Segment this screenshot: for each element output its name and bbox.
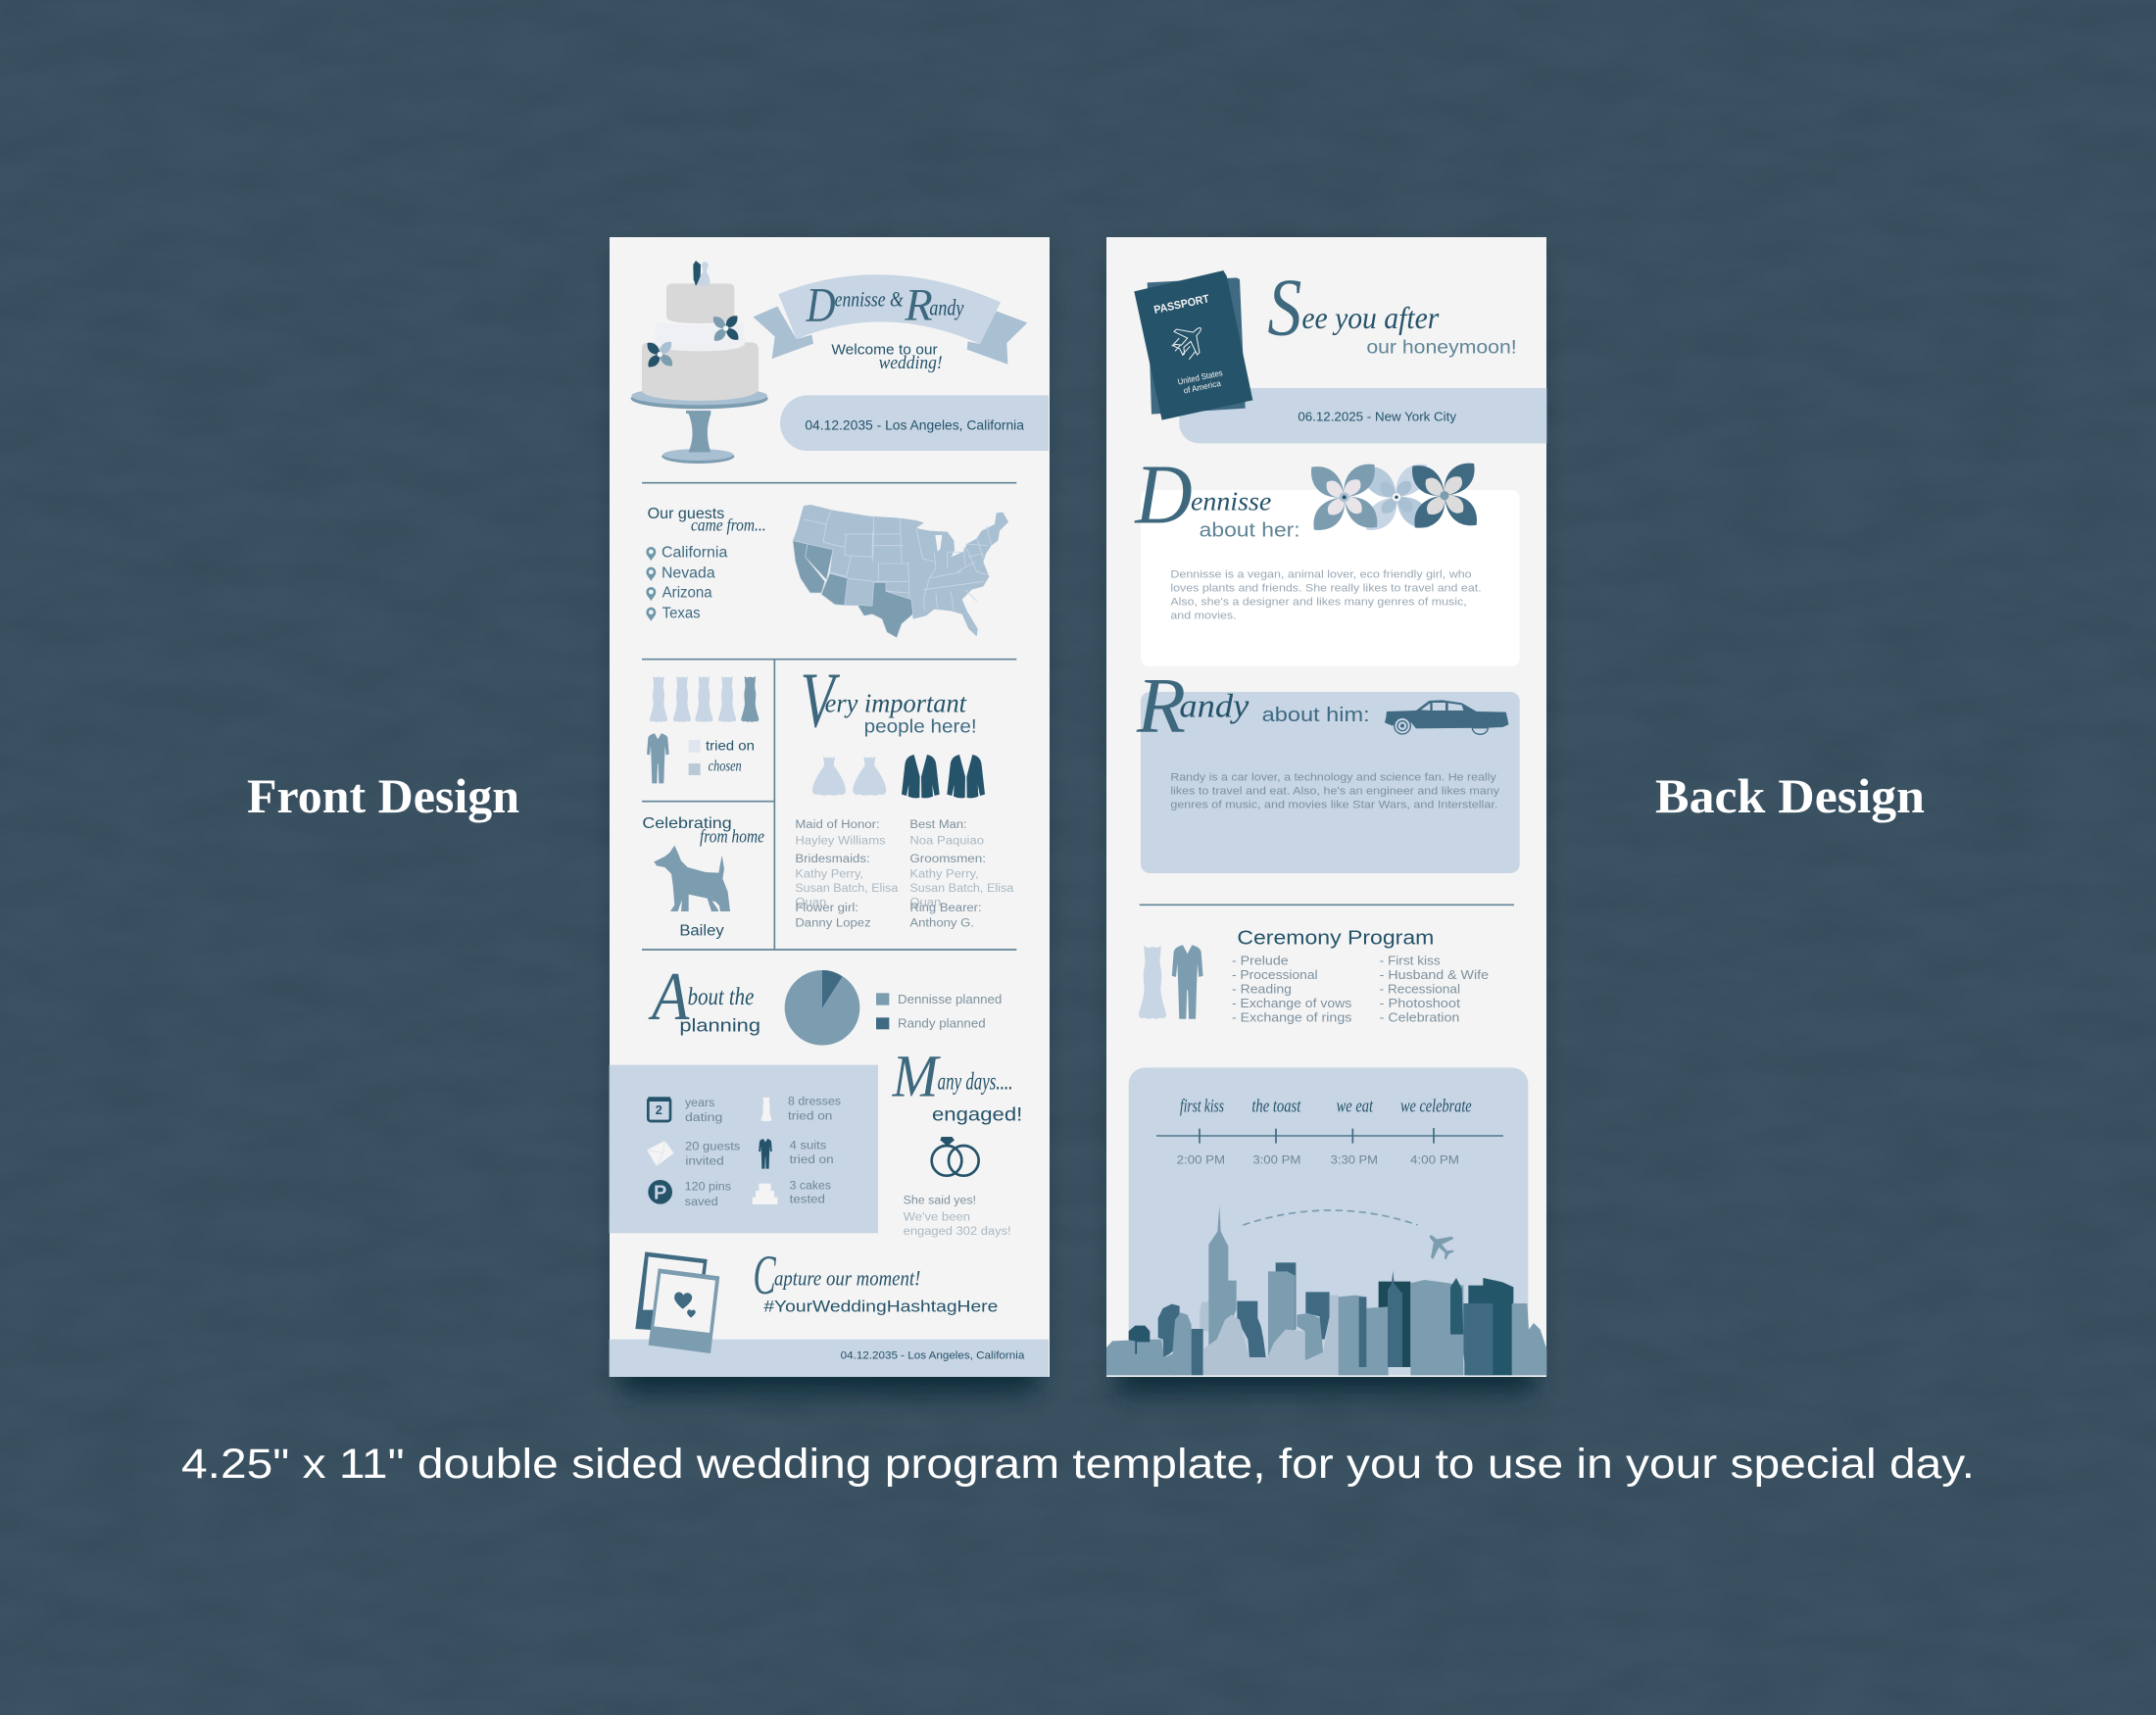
caption: 4.25" x 11" double sided wedding program template, for you to use in your special day. (181, 1441, 1975, 1488)
heading: capture our moment (753, 1246, 998, 1315)
back middle section (1136, 663, 1520, 1025)
bio: Randy: Randy is a car lover, a technology and science fan. He really (1170, 771, 1496, 783)
heading: ceremony program: Ceremony Program (1237, 927, 1434, 949)
banner: couple names: ennisse & (835, 287, 904, 312)
welcome text (831, 343, 943, 373)
icon: white cake (753, 1184, 777, 1204)
bio: Dennisse: and movies. (1170, 610, 1237, 621)
guests heading: Our guests (648, 506, 724, 522)
card: about him (1136, 663, 1520, 873)
map: united states (793, 505, 1008, 638)
icons: bridesmaid gowns and groomsmen jackets (812, 755, 985, 798)
wedding party list: groom side: Kathy Perry, (909, 866, 979, 880)
pie chart: planning share (785, 970, 859, 1046)
bio: Randy: genres of music, and movies like Star Wars, and Interstellar. (1170, 799, 1497, 810)
wedding party list: bride side: Bridesmaids: (795, 852, 870, 865)
wedding party list: groom side: Best Man: (909, 817, 967, 831)
icon: passport: of America (1183, 378, 1222, 396)
icon: pinterest: P (654, 1182, 666, 1203)
panel: front design (610, 237, 1050, 1377)
engaged note (904, 1194, 1011, 1238)
wedding party list: bride side: Maid of Honor: (795, 817, 880, 831)
guest state list: Texas (662, 606, 701, 622)
program list right: - Photoshoot (1380, 996, 1460, 1010)
guests heading: came from... (691, 515, 766, 535)
stat: guests invited (685, 1140, 740, 1167)
engaged note: We've been (904, 1210, 970, 1224)
bio: Randy: likes to travel and eat. Also, he's an engineer and likes many (1170, 785, 1500, 797)
timeline: 3:30 PM (1331, 1152, 1378, 1166)
heading: many days engaged: any days.... (938, 1068, 1012, 1096)
heading: capture our moment: apture our moment! (774, 1266, 920, 1291)
panel: back design (1106, 237, 1546, 1377)
heading: very important people: ery important (825, 689, 967, 718)
bio: Dennisse: Also, she's a designer and likes many genres of music, (1170, 596, 1467, 608)
panel shadows (621, 257, 1535, 1394)
icon: classic car (1385, 700, 1508, 734)
wedding party list: groom side: Susan Batch, Elisa (909, 881, 1014, 895)
heading: see you after: ee you after (1301, 301, 1440, 335)
icon: calendar (648, 1097, 670, 1121)
date band (1179, 388, 1546, 443)
date band: 06.12.2025 - New York City (1298, 410, 1457, 423)
panel: stats (610, 1065, 878, 1233)
timeline: we eat (1337, 1096, 1374, 1116)
engaged note: engaged 302 days! (904, 1224, 1011, 1238)
bio: Dennisse: Dennisse is a vegan, animal lover, eco friendly girl, who (1170, 568, 1472, 580)
bio: Dennisse (1170, 568, 1482, 621)
heading: see you after: our honeymoon! (1366, 338, 1517, 359)
heading: very important people: people here! (864, 717, 977, 738)
timeline: the toast (1251, 1096, 1301, 1116)
wedding party list: bride side: Quan (795, 895, 826, 908)
icon: passport: United States (1177, 368, 1224, 387)
card: about her (1134, 447, 1520, 666)
heading: about the planning: A (648, 959, 690, 1035)
label: front design: Front Design (247, 768, 519, 823)
program list left: - Exchange of rings (1232, 1010, 1352, 1025)
stat: pins saved (685, 1180, 731, 1208)
stat: suits: tried on (790, 1152, 834, 1166)
wedding party list: groom side: Noa Paquiao (909, 834, 984, 848)
heading: capture our moment: #YourWeddingHashtagHere (763, 1297, 998, 1315)
label: back design: Back Design (1655, 768, 1925, 823)
stat: dresses (788, 1095, 841, 1122)
pie legend (876, 993, 1002, 1030)
timeline (1156, 1096, 1503, 1166)
stat: dresses: 8 dresses (788, 1095, 841, 1108)
timeline: 4:00 PM (1410, 1152, 1459, 1166)
program list right: - First kiss (1380, 953, 1441, 967)
wedding party list: bride side: Danny Lopez (795, 915, 871, 929)
stat: cakes tested: 3 cakes (790, 1178, 831, 1192)
icon: passport (1134, 270, 1252, 420)
welcome text: Welcome to our (831, 343, 938, 359)
banner: couple names: andy (929, 296, 964, 321)
stat: dresses: tried on (788, 1108, 832, 1122)
icon: envelope (647, 1141, 674, 1166)
timeline card (1129, 1067, 1528, 1375)
legend: tried on, chosen: tried on (706, 738, 755, 754)
heading: celebrating from home: Celebrating (642, 815, 732, 832)
wedding party list: bride side: Susan Batch, Elisa (795, 881, 899, 895)
bio: Randy (1170, 771, 1500, 810)
flowers (1311, 464, 1477, 530)
engaged note: She said yes! (904, 1194, 976, 1207)
heading: many days engaged: engaged! (932, 1104, 1022, 1125)
front top section (631, 261, 1049, 638)
stat: suits (790, 1138, 834, 1166)
stat: cakes tested (790, 1178, 831, 1206)
icon: polaroid photos (635, 1251, 719, 1353)
icon: passport: PASSPORT (1152, 293, 1210, 317)
front middle section (642, 659, 1016, 1046)
stat: suits: 4 suits (790, 1138, 826, 1152)
date pill (780, 395, 1049, 451)
timeline: 3:00 PM (1252, 1152, 1300, 1166)
icon: dark suit (759, 1139, 772, 1169)
wedding party list: bride side (795, 817, 899, 929)
banner: couple names: R (904, 280, 933, 331)
name: Dennisse (1134, 447, 1300, 541)
icon: calendar: 2 (656, 1103, 662, 1117)
heading: see you after: S (1267, 264, 1301, 354)
legend: tried on, chosen: chosen (709, 759, 742, 775)
heading: many days engaged: M (892, 1043, 942, 1109)
wedding party list: groom side (909, 817, 1014, 929)
timeline: first kiss (1180, 1096, 1224, 1116)
icon: white dress (761, 1097, 771, 1121)
stat: pins saved: 120 pins (685, 1180, 731, 1194)
name: Randy: R (1136, 663, 1186, 750)
front lower section (610, 1043, 1049, 1377)
icons: bride and groom outfits (1139, 945, 1203, 1019)
icon: wedding rings (932, 1137, 979, 1176)
timeline: we celebrate (1400, 1096, 1472, 1116)
program list right: - Recessional (1380, 982, 1460, 997)
name: Dennisse: D (1134, 447, 1193, 541)
icon: pinterest (648, 1180, 672, 1204)
bio: Dennisse: loves plants and friends. She really likes to travel and eat. (1170, 582, 1482, 594)
back top section (1134, 264, 1546, 666)
wedding party list: groom side: Anthony G. (909, 915, 974, 929)
icon: wedding cake (631, 261, 768, 464)
icon: suit (647, 733, 669, 783)
footer band (610, 1340, 1049, 1377)
guests heading (648, 506, 766, 535)
program list left: - Exchange of vows (1232, 996, 1352, 1010)
wedding party list: bride side: Flower girl: (795, 901, 858, 914)
pet name: Bailey (679, 922, 724, 939)
pie legend: Dennisse planned (898, 993, 1002, 1006)
date pill: 04.12.2035 - Los Angeles, California (805, 416, 1024, 432)
legend: tried on, chosen (689, 738, 755, 775)
back lower section (1106, 1067, 1546, 1375)
dresses tried on (650, 676, 759, 722)
skyline (1106, 1205, 1546, 1375)
heading: very important people: V (801, 659, 840, 745)
icon: dog (654, 846, 730, 911)
program list left: - Processional (1232, 967, 1318, 982)
program list right: - Husband & Wife (1380, 967, 1489, 982)
wedding party list: groom side: Ring Bearer: (909, 901, 982, 914)
flight path with plane (1243, 1210, 1460, 1266)
name: Dennisse: about her: (1200, 518, 1300, 541)
stat: years dating: years (685, 1096, 714, 1109)
name: Randy (1136, 663, 1370, 750)
name: Randy: andy (1179, 689, 1250, 725)
heading: celebrating from home: from home (700, 826, 764, 847)
guest state list: Nevada (662, 564, 715, 581)
heading: about the planning: bout the (688, 983, 754, 1010)
heading: many days engaged (892, 1043, 1022, 1125)
wedding party list: groom side: Groomsmen: (909, 852, 986, 865)
heading: about the planning: planning (679, 1015, 760, 1036)
stat: guests invited: 20 guests (685, 1140, 740, 1153)
program list right: - Celebration (1380, 1010, 1459, 1025)
name: Dennisse: ennisse (1191, 487, 1271, 516)
banner: couple names: D (806, 276, 836, 331)
heading: about the planning (648, 959, 760, 1036)
program list left (1232, 953, 1352, 1025)
guest state list (646, 544, 728, 622)
banner: couple names (753, 274, 1027, 365)
wedding party list: bride side: Kathy Perry, (795, 866, 863, 880)
timeline: 2:00 PM (1177, 1152, 1225, 1166)
stat: years dating: dating (685, 1110, 722, 1124)
name: Randy: about him: (1262, 704, 1370, 726)
program list left: - Prelude (1232, 953, 1289, 967)
heading: see you after (1267, 264, 1517, 359)
pie legend: Randy planned (898, 1016, 986, 1030)
program list left: - Reading (1232, 982, 1292, 997)
stat: pins saved: saved (685, 1195, 718, 1208)
cake flowers (648, 316, 738, 367)
wedding party list: groom side: Quan (909, 895, 941, 908)
wedding party list: bride side: Hayley Williams (795, 834, 886, 848)
guest state list: Arizona (662, 584, 712, 601)
heading: very important people (801, 659, 977, 745)
program list right (1380, 953, 1489, 1025)
stat: years dating (685, 1096, 722, 1124)
guest state list: California (662, 544, 728, 561)
heading: celebrating from home (642, 815, 764, 847)
stat: guests invited: invited (685, 1153, 724, 1167)
welcome text: wedding! (879, 353, 943, 373)
heading: capture our moment: C (753, 1246, 776, 1306)
footer band: 04.12.2035 - Los Angeles, California (841, 1350, 1025, 1362)
stat: cakes tested: tested (790, 1193, 825, 1206)
